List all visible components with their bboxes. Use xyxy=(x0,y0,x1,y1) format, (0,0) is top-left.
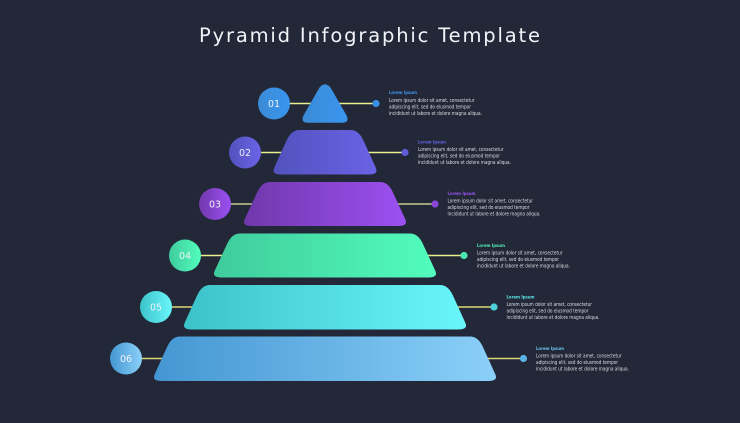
number badge 01 xyxy=(258,88,290,120)
end dot 06 xyxy=(520,355,527,362)
text block 04 xyxy=(477,243,570,270)
text block 02: Lorem ipsum dolor sit amet, consectetur xyxy=(418,147,504,153)
pyramid tier 02 xyxy=(273,130,377,174)
text block 03: adipiscing elit, sed do eiusmod tempor xyxy=(448,205,530,211)
number badge 05 xyxy=(140,291,172,323)
text block 06: incididunt ut labore et dolore magna aliqua. xyxy=(536,366,629,372)
tier 01 xyxy=(258,84,482,123)
text block 06: Lorem Ipsum xyxy=(536,346,564,352)
text block 01: Lorem ipsum dolor sit amet, consectetur xyxy=(389,98,475,104)
end dot 02 xyxy=(401,149,409,156)
text block 03: Lorem Ipsum xyxy=(448,191,476,197)
number badge 05: 05 xyxy=(150,302,162,314)
text block 03: incididunt ut labore et dolore magna aliqua. xyxy=(448,212,541,218)
connector line 05 xyxy=(170,306,494,308)
text block 01: incididunt ut labore et dolore magna aliqua. xyxy=(389,111,482,117)
text block 02: Lorem Ipsum xyxy=(418,140,446,146)
connector line 06 xyxy=(140,358,523,360)
tier 03 xyxy=(199,182,541,226)
tier 02 xyxy=(229,130,511,174)
number badge 06 xyxy=(110,342,142,374)
text block 01: adipiscing elit, sed do eiusmod tempor xyxy=(389,104,472,110)
connector line 02 xyxy=(259,152,405,154)
number badge 04: 04 xyxy=(179,251,191,262)
end dot 05 xyxy=(490,303,498,311)
text block 05 xyxy=(506,294,600,321)
text block 04: adipiscing elit, sed do eiusmod tempor xyxy=(477,257,560,263)
text block 04: Lorem Ipsum xyxy=(477,243,505,249)
number badge 03 xyxy=(199,188,231,220)
text block 02: adipiscing elit, sed do eiusmod tempor xyxy=(418,154,501,160)
text block 03: Lorem ipsum dolor sit amet, consectetur xyxy=(448,198,534,204)
text block 05: adipiscing elit, sed do eiusmod tempor xyxy=(506,308,589,314)
pyramid tier 05 xyxy=(184,285,466,330)
title: Pyramid Infographic Template xyxy=(199,24,540,47)
text block 06 xyxy=(536,346,629,372)
connector line 04 xyxy=(199,254,464,256)
number badge 02 xyxy=(229,136,261,168)
text block 05: incididunt ut labore et dolore magna aliqua. xyxy=(506,315,600,321)
pyramid tier 03 xyxy=(244,182,406,226)
end dot 04 xyxy=(460,252,468,259)
text block 06: adipiscing elit, sed do eiusmod tempor xyxy=(536,360,619,366)
number badge 03: 03 xyxy=(209,200,221,210)
pyramid tier 04 xyxy=(214,234,436,278)
text block 04: incididunt ut labore et dolore magna aliqua. xyxy=(477,264,570,270)
text block 05: Lorem Ipsum xyxy=(506,294,535,300)
text block 01: Lorem Ipsum xyxy=(389,90,417,96)
number badge 01: 01 xyxy=(268,99,280,110)
text block 02: incididunt ut labore et dolore magna aliqua. xyxy=(418,160,511,166)
pyramid tier 06 xyxy=(154,336,496,381)
pyramid tier 01 xyxy=(303,84,347,123)
tier 06 xyxy=(110,336,629,381)
connector line 03 xyxy=(229,203,435,205)
text block 01 xyxy=(389,90,482,117)
tier 05 xyxy=(140,285,600,330)
text block 03 xyxy=(448,191,541,218)
number badge 06: 06 xyxy=(120,354,132,365)
end dot 01 xyxy=(372,100,380,107)
text block 05: Lorem ipsum dolor sit amet, consectetur xyxy=(506,302,593,308)
number badge 02: 02 xyxy=(239,148,251,159)
number badge 04 xyxy=(169,240,201,272)
tier 04 xyxy=(169,234,570,278)
text block 02 xyxy=(418,140,511,166)
connector line 01 xyxy=(288,102,376,104)
text block 04: Lorem ipsum dolor sit amet, consectetur xyxy=(477,250,563,256)
end dot 03 xyxy=(431,200,439,208)
text block 06: Lorem ipsum dolor sit amet, consectetur xyxy=(536,354,622,360)
